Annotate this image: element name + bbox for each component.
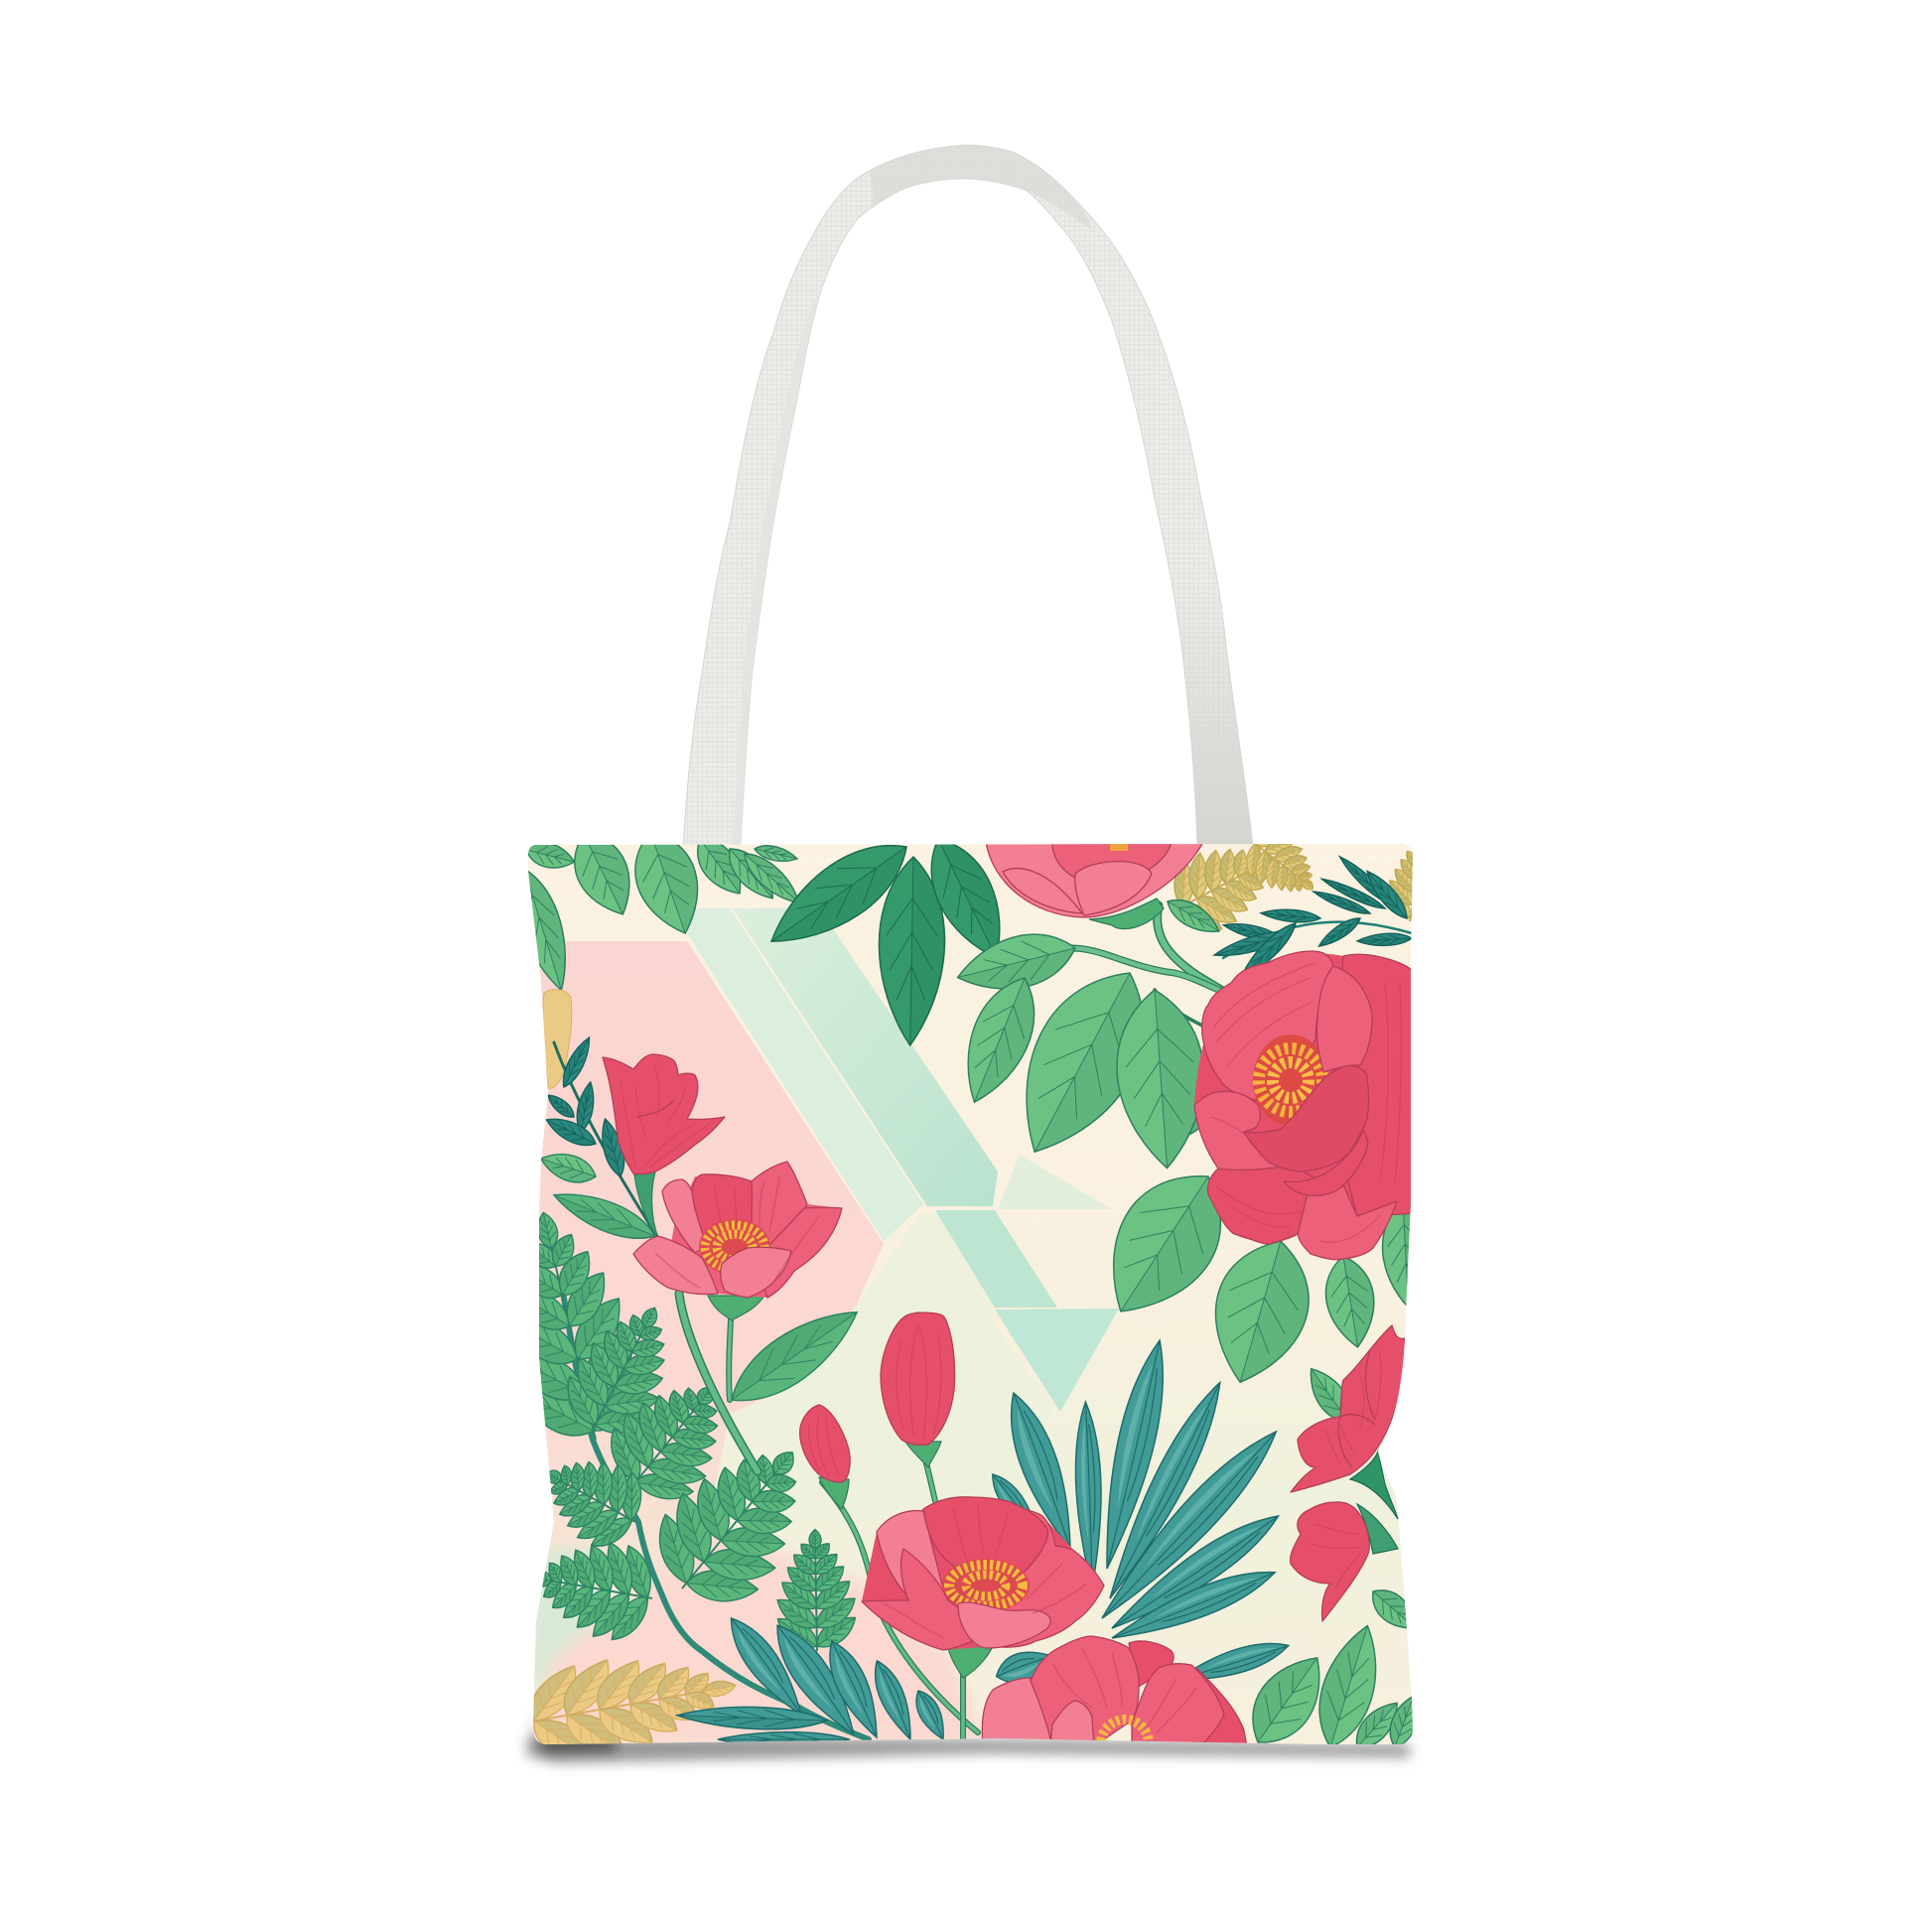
pale small triangle	[998, 1155, 1112, 1209]
stem and calyx	[1350, 1451, 1398, 1519]
lower petal	[1207, 1168, 1314, 1245]
pink flower center	[862, 1497, 1104, 1678]
left lower petal	[1194, 1091, 1291, 1170]
stamens	[1253, 1035, 1328, 1126]
upper left petal	[1202, 951, 1334, 1102]
tote bag body	[528, 844, 1413, 1744]
flower stems	[679, 1293, 978, 1739]
strap fold shade, right foot	[1170, 576, 1253, 846]
fabric background	[516, 839, 1420, 1752]
geometric pattern	[526, 908, 1119, 1747]
big red peony	[1194, 951, 1414, 1260]
right side flowers	[1291, 1325, 1424, 1638]
gold sprigs, top right	[1173, 844, 1413, 931]
flower base	[665, 1162, 842, 1298]
gold fern	[533, 1659, 737, 1744]
bag handle	[683, 145, 1253, 846]
stamens	[942, 1559, 1030, 1612]
strap fold shadow, top	[869, 145, 1092, 230]
light mint band	[671, 908, 923, 1241]
front fold	[1284, 1129, 1368, 1195]
calyx	[634, 1172, 658, 1238]
stamens	[699, 1219, 770, 1275]
flower base	[862, 1497, 1104, 1650]
left teal sprig with yellow flower	[537, 990, 660, 1250]
pink flower bottom, cropped	[982, 1636, 1247, 1767]
dark shadow at left corner	[528, 1713, 616, 1751]
calyx	[708, 1296, 764, 1320]
calyx	[905, 1442, 941, 1467]
center upright petal	[1316, 966, 1372, 1072]
top peony, cropped	[986, 842, 1203, 929]
bottom right leaves	[1235, 1618, 1425, 1758]
lower mint band	[935, 1210, 1057, 1308]
tote bag illustration	[519, 145, 1417, 1771]
main fern stem	[562, 1286, 869, 1739]
calyx	[819, 1477, 849, 1509]
inner fold	[1244, 1065, 1369, 1172]
tulip bud small	[800, 1405, 850, 1509]
pink hexagon	[526, 941, 884, 1588]
flower base	[1194, 953, 1414, 1259]
mint triangle	[995, 1309, 1119, 1412]
lower pink patch	[536, 1529, 988, 1747]
bottom petal	[1297, 1185, 1398, 1261]
pink flower left	[633, 1162, 842, 1320]
pale mint left patch	[526, 1549, 596, 1688]
teal palm fan	[985, 1336, 1292, 1691]
top left leaves	[528, 844, 798, 991]
ground shadow	[526, 1713, 1410, 1763]
pale lower triangle	[730, 1213, 1019, 1418]
dark green leaves	[770, 844, 1001, 1046]
ferns	[533, 1211, 872, 1744]
mint band	[733, 908, 998, 1206]
back petal	[1330, 954, 1414, 1217]
red flower upper left	[603, 1054, 725, 1238]
tulip bud large	[881, 1312, 955, 1467]
calyx	[1089, 898, 1164, 929]
yellow flower	[543, 990, 572, 1088]
strap fold, left inner crease	[733, 285, 823, 846]
seam stitching	[529, 858, 1413, 860]
lower bud	[1357, 1504, 1398, 1554]
lower left teal leaves	[675, 1616, 944, 1741]
stems and leaves around peony	[948, 892, 1431, 1395]
teal sprig, top right	[1212, 855, 1412, 970]
calyx	[948, 1646, 993, 1678]
